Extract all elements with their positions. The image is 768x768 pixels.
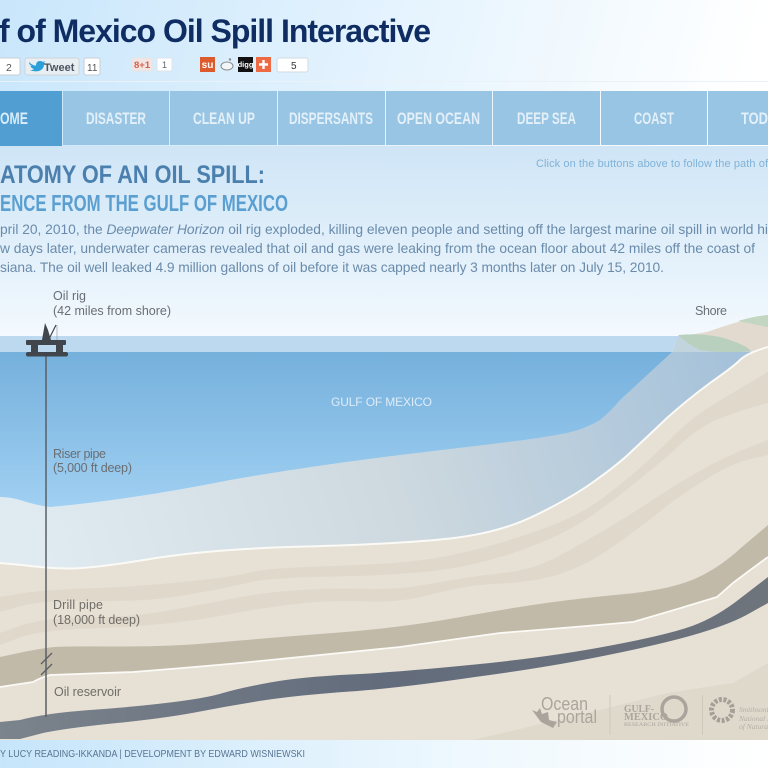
lower right sediment shading xyxy=(473,663,768,740)
navigation bar xyxy=(0,91,768,146)
nav: disaster xyxy=(63,91,169,145)
nav: open ocean: OPEN OCEAN xyxy=(397,110,480,128)
nav: open ocean xyxy=(386,91,492,145)
nav: clean up xyxy=(170,91,277,145)
label: oil rig: Oil rig xyxy=(53,289,86,303)
social share bar: su xyxy=(202,60,213,71)
social share bar: digg xyxy=(238,60,254,69)
label: oil rig xyxy=(53,289,171,318)
seafloor line xyxy=(0,347,768,569)
logo divider xyxy=(702,695,703,735)
logo: gulf of mexico research initiative: GULF- xyxy=(624,704,654,715)
nav: home xyxy=(0,91,62,146)
logo: gulf of mexico research initiative: MEXICO xyxy=(624,712,668,723)
shallow shelf water over land xyxy=(672,336,752,352)
vegetation patch at shoreline xyxy=(678,334,751,352)
navigation hint: Click on the buttons above to follow the path of xyxy=(536,158,768,170)
seawater wash xyxy=(0,352,768,600)
lower sediment band xyxy=(0,440,768,645)
deep blue water xyxy=(0,352,672,507)
logo divider xyxy=(610,695,611,735)
logo: smithsonian xyxy=(712,700,768,731)
intro panel background xyxy=(0,146,768,336)
label: drill pipe xyxy=(53,598,140,627)
nav: dispersants: DISPERSANTS xyxy=(289,110,373,128)
social share bar: 1 xyxy=(162,60,167,70)
nav: today xyxy=(708,91,768,145)
logo: ocean portal: Ocean xyxy=(541,694,588,714)
heading: ATOMY OF AN OIL SPILL: xyxy=(0,161,265,189)
footer credits: Y LUCY READING-IKKANDA | DEVELOPMENT BY EDWARD WISNIEWSKI xyxy=(0,749,305,760)
header divider line xyxy=(0,81,768,82)
white strata line xyxy=(0,557,768,687)
intro text xyxy=(0,222,768,275)
logo: ocean portal: portal xyxy=(557,707,597,727)
social share bar xyxy=(0,57,308,75)
nav: deep sea: DEEP SEA xyxy=(517,110,576,128)
nav: deep sea xyxy=(493,91,600,145)
label: riser pipe: Riser pipe xyxy=(53,447,106,461)
label: gulf of mexico: GULF OF MEXICO xyxy=(331,395,432,409)
intro text: siana. The oil well leaked 4.9 million gallons of oil before it was capped nearly 3 months later on July 15, 2010. xyxy=(0,260,664,275)
nav: home: OME xyxy=(0,110,28,128)
label: riser pipe: (5,000 ft deep) xyxy=(53,461,132,475)
water surface band xyxy=(0,336,678,352)
social share bar: 8+1 xyxy=(134,60,151,71)
shore land above water xyxy=(676,315,768,360)
intro text: pril 20, 2010, the Deepwater Horizon oil rig exploded, killing eleven people and setting off the largest marine oil spill in world hi xyxy=(0,222,768,237)
page title: f of Mexico Oil Spill Interactive xyxy=(0,13,431,49)
brown rock layer xyxy=(0,525,768,687)
social share bar: 5 xyxy=(291,61,297,72)
seabed sediment xyxy=(0,347,768,740)
nav: coast: COAST xyxy=(634,110,674,128)
label: shore: Shore xyxy=(695,304,727,318)
oil reservoir layer xyxy=(0,577,768,739)
nav: disaster: DISASTER xyxy=(86,110,146,128)
icon: oil rig xyxy=(26,323,68,356)
subheading: ENCE FROM THE GULF OF MEXICO xyxy=(0,190,288,216)
upper sediment band xyxy=(0,372,768,612)
cross-section diagram xyxy=(0,315,768,740)
nav: clean up: CLEAN UP xyxy=(193,110,255,128)
label: riser pipe xyxy=(53,447,132,475)
label: oil rig: (42 miles from shore) xyxy=(53,304,171,318)
intro text: w days later, underwater cameras revealed that oil and gas were leaking from the ocean floor about 42 miles off the coast of xyxy=(0,241,755,256)
logo: gulf of mexico research initiative xyxy=(624,697,689,728)
nav: coast xyxy=(601,91,707,145)
social share bar: 11 xyxy=(87,63,98,74)
social share bar: 2 xyxy=(6,62,12,74)
logo: gulf of mexico research initiative: RESEARCH INITIATIVE xyxy=(624,723,689,728)
label: drill pipe: Drill pipe xyxy=(53,598,103,612)
label: drill pipe: (18,000 ft deep) xyxy=(53,613,140,627)
label: oil reservoir: Oil reservoir xyxy=(54,685,121,699)
social share bar: Tweet xyxy=(44,62,75,74)
logo: ocean portal xyxy=(532,694,597,728)
page header background xyxy=(0,0,768,146)
nav: dispersants xyxy=(278,91,385,145)
footer background xyxy=(0,740,768,768)
drill pipe xyxy=(41,352,52,717)
